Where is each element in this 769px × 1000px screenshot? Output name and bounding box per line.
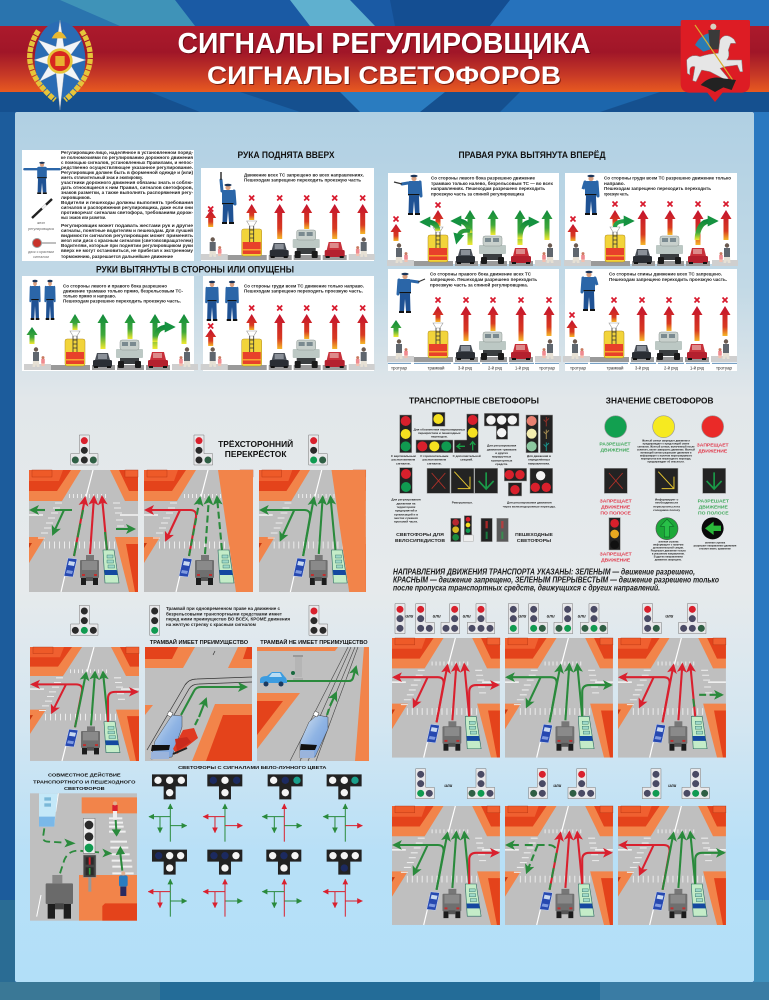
tram rule text <box>166 606 290 627</box>
panel: arm raised, all stopped <box>201 168 375 261</box>
meaning captions <box>599 440 737 563</box>
meaning captions: ЗАПРЕЩАЕТ <box>600 551 632 557</box>
signals: right block row 1: или <box>578 613 586 618</box>
signals: right block row 1: или <box>463 613 471 618</box>
panel: right arm, right side <box>387 269 561 371</box>
tram <box>151 711 182 759</box>
signals: right block row 2: или <box>444 783 453 788</box>
light captions: расположением <box>392 458 415 462</box>
section: joint signals <box>30 765 362 921</box>
light captions: секцией. <box>460 458 473 462</box>
note: transport directions <box>393 568 719 592</box>
heading: arms out or lowered: РУКИ ВЫТЯНУТЫ В СТОРОНЫ ИЛИ ОПУЩЕНЫ <box>96 264 294 274</box>
meaning captions: Информирует о <box>655 497 678 501</box>
intro text: противоречат сигналам светофора, требованиям дорож- <box>61 209 194 215</box>
intro text: торможению, разрешается дальнейшее движение <box>61 253 173 259</box>
intersection R5: red with dashed green left <box>505 806 613 925</box>
meaning captions: дополнительной секции. <box>653 547 684 550</box>
meaning captions: в указанном направлении. <box>652 553 685 556</box>
lane labels: трамвай <box>428 364 445 370</box>
panel text: Со стороны левого и правого бока разрешено <box>63 282 167 288</box>
signal pole <box>83 818 96 892</box>
signals: right block row 1: или <box>433 613 441 618</box>
panel text <box>244 172 364 182</box>
signal: vertical green <box>150 605 160 635</box>
icon: controller chest view <box>583 175 598 215</box>
intersection R6: left red, rest green <box>618 806 726 925</box>
meaning captions: зеленого, велит завершить движение. Желтый <box>637 449 695 452</box>
red truck <box>173 728 198 754</box>
light captions: Для движения в <box>527 454 551 458</box>
meaning captions: РАЗРЕШАЕТ <box>599 442 631 448</box>
scene: tram has priority <box>145 647 252 761</box>
meanings: lights <box>604 416 726 550</box>
lane labels: 2-й ряд <box>664 364 678 370</box>
panel text <box>609 272 727 282</box>
intro text: Регулировщик должен быть в форменной одежде и (или) <box>61 169 194 175</box>
panel text: Со стороны груди всем ТС разрешено движение только <box>604 176 731 180</box>
meaning captions: разрешает направление движения <box>694 544 737 547</box>
lane labels: тротуар <box>539 366 555 370</box>
light captions: Для регулирования <box>487 444 516 448</box>
light captions: переходов. <box>431 435 448 439</box>
panel text: проезжую часть. <box>604 192 629 196</box>
light captions: С горизонтальным <box>420 454 448 458</box>
meaning captions: ПО ПОЛОСЕ <box>600 510 632 516</box>
meaning captions: ДВИЖЕНИЕ <box>600 448 630 454</box>
meaning captions: перекрестка или пешеходного перехода, <box>641 458 691 461</box>
section: tram priority signals and notes <box>71 605 368 646</box>
panel text: Пешеходам запрещено переходить проезжую часть. <box>609 277 727 282</box>
light captions: сигналов. <box>427 461 442 465</box>
icon: controller pointing left <box>394 175 421 215</box>
meaning captions: перестроиться на <box>653 504 680 508</box>
panel text: направо. <box>604 181 625 186</box>
intersection R4: green with red right <box>392 806 500 925</box>
tram rule text: на желтую стрелку с красным сигналом <box>166 622 256 627</box>
intro text <box>60 150 194 259</box>
intersection R3: red with dashed green right <box>618 638 726 758</box>
meaning captions: информирует о наличии нерегулируемого <box>640 455 693 458</box>
heading: joint operation: СОВМЕСТНОЕ ДЕЙСТВИЕ <box>48 771 121 779</box>
blue car <box>260 672 287 686</box>
section: three-way junction signals and heading <box>71 435 327 465</box>
intro text: редственно осуществляющее указанное регулирование. <box>61 165 193 170</box>
heading: tram has priority: ТРАМВАЙ ИМЕЕТ ПРЕИМУЩЕСТВО <box>150 638 249 646</box>
intro text: сигналов и распоряжения регулировщика, даже если они <box>61 205 193 210</box>
caption: pedestrian lights: СВЕТОФОРЫ <box>517 538 551 544</box>
panel text: Движение всех ТС запрещено во всех направлениях. <box>244 172 364 178</box>
road scene <box>387 298 561 362</box>
panel text: движение трамваю только прямо, безрельсовым ТС- <box>63 288 183 294</box>
light captions: проезжей части. <box>394 520 418 524</box>
lane labels: 1-й ряд <box>690 364 704 370</box>
meaning captions: ДВИЖЕНИЕ <box>601 504 631 510</box>
heading: right arm forward: ПРАВАЯ РУКА ВЫТЯНУТА ВПЕРЁД <box>458 150 606 160</box>
light captions: местах сужения <box>394 516 418 520</box>
heading: three-way junction: ТРЁХСТОРОННИЙ <box>218 438 293 449</box>
light captions: С вертикальным <box>391 454 416 458</box>
icon: two controllers front view <box>206 281 238 321</box>
meaning captions: предупреждает о предстоящей смене <box>643 443 690 446</box>
icon: fire service emblem <box>30 20 90 110</box>
disc caption: диск с красным <box>28 250 54 254</box>
intro text: вверх не могут остановиться, не прибегая к экстренному <box>61 247 193 253</box>
panel: arms lowered, side <box>22 276 198 371</box>
tram <box>300 711 328 758</box>
bus <box>39 793 58 827</box>
heading: meaning of lights: ЗНАЧЕНИЕ СВЕТОФОРОВ <box>606 395 713 405</box>
icons: eight lunar signals with directions <box>148 774 362 917</box>
signal: L with green <box>309 435 327 465</box>
intro text: ных знаков или разметки. <box>61 215 106 220</box>
intro text: сигналы, понятные водителям и пешеходам. Для лучшей <box>61 227 193 233</box>
signal on post <box>291 655 303 679</box>
baton caption: жезл <box>37 221 45 225</box>
meaning captions: и может иметь уравнение <box>699 547 731 550</box>
signals: right block row 1: или <box>547 613 555 618</box>
meaning captions: сигналов. Желтый сигнал, включенный после <box>637 446 695 449</box>
intersection 1: straight on red, side arrows <box>29 470 138 592</box>
signal: T with two green side arrows <box>71 435 98 465</box>
light captions: транспортных <box>491 458 513 462</box>
caption: bicycle lights: ВЕЛОСИПЕДИСТОВ <box>395 538 445 544</box>
icon: red signal disc <box>32 238 56 248</box>
panel text: Пешеходам запрещено переходить проезжую часть <box>244 178 361 182</box>
lane labels: трамвай <box>606 364 624 370</box>
heading: white-lunar signals: СВЕТОФОРЫ С СИГНАЛАМИ БЕЛО-ЛУННОГО ЦВЕТА <box>178 765 327 771</box>
title banner <box>0 26 769 92</box>
light captions: Реверсивные. <box>452 501 473 505</box>
lane labels: 3-й ряд <box>635 364 649 370</box>
intro text: дать относящиеся к ним Правил, сигналов светофоров, <box>61 184 193 190</box>
intro text: лировщиков. <box>61 195 91 200</box>
heading: joint operation <box>33 771 136 792</box>
signal: L red <box>309 605 328 635</box>
light captions: Для регулирования <box>391 497 421 501</box>
intro text: знаков разметки, а также выполнять распоряжения регу- <box>61 190 194 195</box>
meaning captions: ЗАПРЕЩАЕТ <box>600 498 632 504</box>
light captions: территориях <box>397 505 416 509</box>
intro text: ке полномочиями по регулированию дорожного движения <box>61 155 193 160</box>
meaning captions: движение запрещено. <box>655 559 682 562</box>
caption: pedestrian lights <box>515 532 553 544</box>
intersection 4: left red, straight green, right red <box>30 647 139 761</box>
intro text: видимости сигналов регулировщик может применять <box>61 233 193 238</box>
signal: L with green side arrow <box>194 435 213 465</box>
meaning captions: ДВИЖЕНИЕ <box>699 504 729 510</box>
panel text <box>431 174 553 196</box>
scene: tram has no priority <box>257 647 369 761</box>
panel text: запрещено. Пешеходам разрешено переходить <box>430 277 537 282</box>
intro text: Регулировщик может подавать жестами рук и другие <box>61 223 194 228</box>
caption: bicycle lights: СВЕТОФОРЫ ДЛЯ <box>396 532 444 538</box>
light captions: перекрёстков и пешеходных <box>418 431 461 435</box>
panel text: Пешеходам разрешено переходить проезжую часть. <box>63 298 181 304</box>
road scene <box>201 306 375 370</box>
icon: controller pointing right <box>398 273 425 313</box>
light captions: движения трамваев <box>487 447 517 451</box>
road scene <box>563 298 737 362</box>
heading: transport lights: ТРАНСПОРТНЫЕ СВЕТОФОРЫ <box>409 395 539 405</box>
road scene <box>564 202 738 266</box>
meaning captions: Разрешает движение только <box>651 550 686 553</box>
lane labels: тротуар <box>570 366 586 370</box>
light captions: определённых <box>528 458 550 462</box>
meaning captions: информирует о наличии <box>653 544 684 547</box>
panel text: проезжую часть за спиной регулировщика. <box>430 282 528 288</box>
light captions: через железнодорожные переезды. <box>503 504 556 508</box>
meaning captions: зеленая стрелка <box>705 541 726 544</box>
heading: tram has no priority: ТРАМВАЙ НЕ ИМЕЕТ ПРЕИМУЩЕСТВО <box>260 638 368 646</box>
signals: right block row 2: или <box>553 783 562 788</box>
meaning captions: ЗАПРЕЩАЕТ <box>697 442 729 448</box>
meaning captions: соседнюю полосу <box>653 508 680 512</box>
panel text <box>430 270 537 288</box>
meaning captions: Желтый сигнал запрещает движение и <box>642 440 690 443</box>
intersection R1: all red <box>392 638 500 758</box>
lane labels: тротуар <box>716 366 732 370</box>
light captions: Для регулирования движения <box>507 500 552 504</box>
panel text: Со стороны правого бока движение всех ТС <box>430 270 532 276</box>
caption: bicycle lights <box>395 532 445 544</box>
road scene <box>24 314 198 370</box>
panel text: только прямо и направо. <box>63 294 116 298</box>
lane labels: 1-й ряд <box>515 364 529 370</box>
panel text: проезжую часть за спиной регулировщика <box>431 190 524 196</box>
panel text: Со стороны левого бока разрешено движение <box>431 174 535 180</box>
title <box>178 28 591 90</box>
intro text: Водители и пешеходы должны выполнять требования <box>61 199 193 205</box>
signals: right block row 1: или <box>518 613 527 618</box>
meaning captions: зеленая стрелка <box>658 541 679 544</box>
meaning captions: РАЗРЕШАЕТ <box>698 498 729 504</box>
lane labels: тротуар <box>391 366 407 370</box>
meaning captions: В других направлениях <box>654 556 683 559</box>
panel: right arm, left side <box>387 173 561 266</box>
heading: joint operation: СВЕТОФОРОВ <box>64 786 105 792</box>
meaning captions: необходимости <box>655 501 678 505</box>
panel text: Пешеходам запрещено переходить проезжую часть. <box>244 288 363 294</box>
light captions: предприятий и <box>395 509 417 513</box>
meaning captions: предупреждает об опасности. <box>647 461 685 464</box>
heading: three-way junction: ПЕРЕКРЁСТОК <box>225 449 287 459</box>
intro text: с помощью сигналов, установленных Правилами, и непос- <box>61 160 193 165</box>
panel text: Пешеходам запрещено переходить переходить <box>604 186 711 191</box>
signals: right block row 2: или <box>668 783 677 788</box>
light captions: и других <box>495 451 508 455</box>
lane labels: 3-й ряд <box>458 364 472 370</box>
icon: controller back view <box>582 271 597 311</box>
panel text: направлениях. Пешеходам разрешено переходить <box>431 186 545 191</box>
baton caption: регулировщика <box>28 227 54 231</box>
tram rule text: безрельсовыми транспортными средствами имеет <box>166 611 282 616</box>
light captions: С дополнительной <box>453 454 481 458</box>
light captions: направлениях. <box>528 461 550 465</box>
tram rule text: перед ними преимущество ВО ВСЕХ, КРОМЕ движения <box>166 617 290 622</box>
panel text: трамваю только налево, безрельсовым ТС — во всех <box>431 180 553 186</box>
light captions <box>391 428 556 524</box>
signals: right block row 1: или <box>405 613 414 618</box>
meaning captions: ДВИЖЕНИЕ <box>698 448 728 454</box>
panel text <box>604 176 731 196</box>
intersection R2: all green <box>505 638 613 758</box>
icon: Moscow coat of arms <box>681 20 750 102</box>
intro text: иметь отличительный знак и экипировку. <box>61 174 143 180</box>
light captions: расположением <box>423 458 446 462</box>
signals: right block row 1 <box>395 604 706 634</box>
lane labels: 2-й ряд <box>488 364 502 370</box>
heading: arm raised: РУКА ПОДНЯТА ВВЕРХ <box>238 150 334 160</box>
pedestrians <box>112 801 128 896</box>
intro text: Регулировщик-лицо, наделённое в установленном поряд- <box>61 150 193 155</box>
light captions: Для обозначения нерегулируемых <box>414 428 465 432</box>
intro text: Водителям, которые при поднятии регулировщиком руки <box>61 243 193 248</box>
panel: right arm, back side <box>563 269 737 371</box>
baton caption <box>28 221 54 231</box>
title: СИГНАЛЫ РЕГУЛИРОВЩИКА <box>178 28 591 60</box>
truck <box>46 875 73 919</box>
panel text <box>244 284 364 294</box>
lane labels <box>565 363 737 370</box>
panel text: Со стороны груди всем ТС движение только направо. <box>244 284 364 288</box>
lane labels <box>388 363 559 370</box>
light captions: средств. <box>495 462 508 466</box>
tram rule text: Трамвай при одновременном праве на движение с <box>166 606 281 611</box>
intersection 3: all green <box>259 470 366 592</box>
signal: T green <box>71 605 98 635</box>
intro text: жезл или диск с красным сигналом (световозвращателем) <box>60 238 193 243</box>
panel: arms lowered, front <box>201 276 375 371</box>
panel: traffic controller intro <box>22 150 194 261</box>
note: transport directions: после пропуска транспортных средств, движущихся с других направлений. <box>393 584 660 592</box>
meaning captions: ПО ПОЛОСЕ <box>698 510 729 516</box>
note: transport directions: КРАСНЫМ — движение запрещено, ЗЕЛЕНЫМ ПРЕРЫВЕСТЫМ — движение разрешено только <box>393 576 719 584</box>
light captions: организаций и в <box>394 512 418 516</box>
heading: joint operation: ТРАНСПОРТНОГО И ПЕШЕХОДНОГО <box>33 779 136 785</box>
disc caption: сигналом <box>33 255 49 259</box>
signals: right block row 2 <box>416 769 709 799</box>
icon: two controllers side view <box>30 280 55 320</box>
intersection 2: left on red, straight dashed green <box>144 470 253 592</box>
heading: three-way junction <box>218 438 293 459</box>
icon: baton <box>32 199 52 218</box>
icon: controller arm up <box>221 172 235 224</box>
meaning captions: мигающий сигнал разрешает движение и <box>640 452 692 455</box>
icon: controller arms out <box>24 162 60 194</box>
title: СИГНАЛЫ СВЕТОФОРОВ <box>207 62 561 90</box>
road scene <box>387 202 561 266</box>
disc caption <box>28 250 54 259</box>
intro text: участники дорожного движения обязаны знать и соблю- <box>61 179 194 185</box>
section: transport traffic lights <box>391 395 737 563</box>
panel text: Со стороны спины движение всех ТС запрещено. <box>609 272 722 276</box>
signals: right block row 1: или <box>665 613 674 618</box>
light captions: маршрутных <box>492 455 512 459</box>
scene: vehicle and pedestrian signals <box>30 793 137 921</box>
caption: pedestrian lights: ПЕШЕХОДНЫЕ <box>515 532 553 538</box>
panel: right arm, chest side <box>564 173 738 266</box>
road scene <box>201 196 375 260</box>
meaning captions: ДВИЖЕНИЕ <box>601 557 631 563</box>
traffic lights group <box>400 412 553 542</box>
light captions: сигналов. <box>396 461 411 465</box>
panel text <box>63 282 183 304</box>
note: transport directions: НАПРАВЛЕНИЯ ДВИЖЕНИЯ ТРАНСПОРТА УКАЗАНЫ: ЗЕЛЕНЫМ — движение разрешено, <box>393 568 695 576</box>
light captions: движения на <box>397 501 416 505</box>
